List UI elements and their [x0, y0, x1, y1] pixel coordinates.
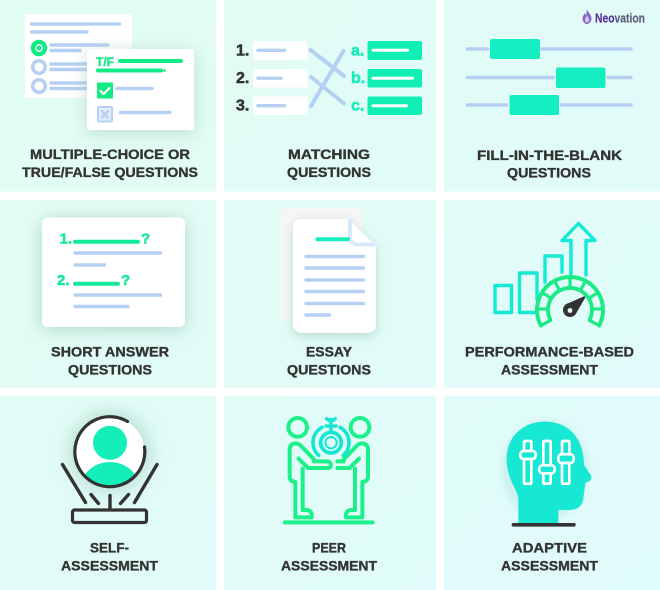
target	[313, 419, 349, 455]
panel: adaptive assessment	[444, 396, 660, 590]
heading: ASSESSMENT	[61, 558, 158, 574]
panel: self-assessment	[0, 396, 216, 590]
icon: quiz cards	[25, 14, 194, 133]
icon: answer sheet: 2.	[57, 272, 70, 289]
right items: b.	[351, 70, 365, 87]
icon: person hologram	[62, 412, 157, 522]
left items: 1.	[236, 42, 249, 60]
multiple choice card	[25, 14, 132, 98]
heading	[51, 344, 169, 378]
true/false card	[87, 49, 194, 133]
heading: ESSAY	[306, 344, 353, 360]
icon: fill-in blanks	[468, 39, 631, 115]
people	[285, 418, 373, 522]
panel: multiple-choice or true/false questions	[0, 0, 216, 192]
panel: fill-in-the-blank questions	[444, 0, 660, 192]
icon: answer sheet: ?	[121, 272, 130, 289]
panel: performance-based assessment	[444, 200, 660, 388]
heading: ASSESSMENT	[501, 558, 598, 574]
icon: gauge	[537, 277, 603, 326]
heading: SELF-	[90, 540, 129, 556]
icon: bars and arrow	[495, 224, 595, 312]
heading: MULTIPLE-CHOICE OR	[30, 146, 190, 162]
heading: SHORT ANSWER	[51, 344, 169, 360]
panel: matching questions	[224, 0, 436, 192]
gauge needle	[563, 296, 585, 317]
heading	[22, 146, 198, 180]
heading: MATCHING	[288, 146, 370, 162]
left items	[236, 41, 308, 115]
right items: a.	[351, 42, 364, 60]
heading: ASSESSMENT	[501, 362, 598, 378]
heading	[465, 344, 634, 378]
heading	[287, 146, 371, 180]
icon: matching columns	[236, 41, 422, 115]
icon: two people with target	[285, 418, 373, 522]
heading: QUESTIONS	[68, 362, 152, 378]
left items: 2.	[236, 70, 249, 87]
heading: TRUE/FALSE QUESTIONS	[22, 164, 198, 180]
heading	[61, 540, 158, 574]
heading: PEER	[312, 540, 346, 556]
heading: ADAPTIVE	[512, 540, 587, 556]
heading: ASSESSMENT	[281, 558, 377, 574]
sliders	[520, 441, 574, 484]
panel: short answer questions	[0, 200, 216, 388]
icon: head with sliders	[502, 420, 591, 527]
heading	[287, 344, 371, 378]
heading	[477, 147, 622, 180]
right items: c.	[351, 98, 364, 114]
panel: peer assessment	[224, 396, 436, 590]
icon: answer sheet	[42, 218, 185, 329]
heading	[501, 540, 598, 574]
heading: QUESTIONS	[287, 362, 371, 378]
heading: QUESTIONS	[507, 164, 591, 180]
icon: document	[280, 208, 376, 336]
logo: Neovation	[582, 9, 645, 26]
right items	[351, 41, 422, 115]
heading	[281, 540, 377, 574]
logo: Neovation: Neovation	[595, 12, 645, 26]
heading: FILL-IN-THE-BLANK	[477, 147, 622, 163]
heading: PERFORMANCE-BASED	[465, 344, 634, 360]
icon: answer sheet: 1.	[60, 230, 72, 248]
heading: QUESTIONS	[287, 164, 371, 180]
panel: essay questions	[224, 200, 436, 388]
icon: answer sheet: ?	[141, 230, 150, 248]
left items: 3.	[236, 98, 249, 114]
connecting lines	[310, 50, 344, 106]
true/false card: T/F	[96, 57, 114, 69]
